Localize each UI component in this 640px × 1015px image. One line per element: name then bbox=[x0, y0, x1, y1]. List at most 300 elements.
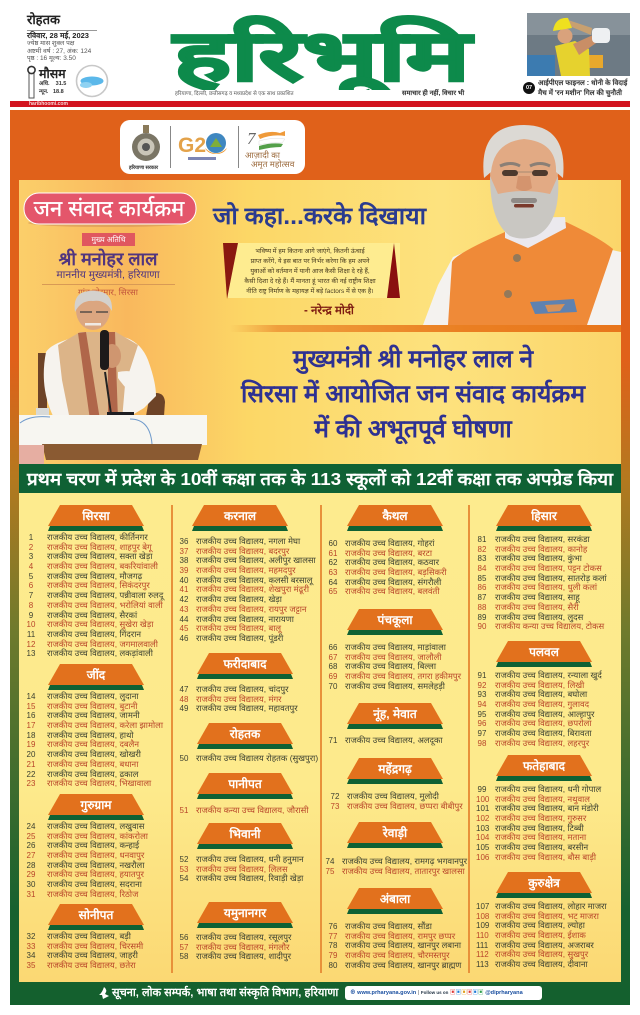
school list: Faridabad: राजकीय उच्च विद्यालय, महावतपुर bbox=[196, 703, 298, 713]
quote right marker bbox=[387, 243, 400, 298]
chief guest name: श्री मनोहर लाल bbox=[59, 249, 157, 269]
school list: Palwal: राजकीय उच्च विद्यालय, गुलावद bbox=[495, 699, 589, 709]
school list: Sirsa: राजकीय उच्च विद्यालय, लकड़ांवाली bbox=[47, 648, 153, 658]
event banner bbox=[24, 192, 196, 227]
text: 34 bbox=[27, 951, 35, 960]
school list: Panchkula: राजकीय उच्च विद्यालय, माड़ांवाला bbox=[345, 642, 446, 652]
footer bbox=[10, 982, 630, 1005]
school list: Kaithal bbox=[345, 539, 447, 597]
district header: Sonipat bbox=[48, 904, 144, 930]
text: 105 bbox=[476, 843, 489, 852]
school list: Jind: राजकीय उच्च विद्यालय, बधाना bbox=[47, 759, 138, 769]
cricket caption bbox=[538, 78, 628, 97]
school list: Kurukshetra: राजकीय उच्च विद्यालय, अजराबर bbox=[495, 940, 594, 950]
school list: Sirsa: राजकीय उच्च विद्यालय, मौजगढ़ bbox=[47, 571, 142, 581]
school list: Kurukshetra: राजकीय उच्च विद्यालय, भट माजरा bbox=[495, 911, 599, 921]
school list: Jind: राजकीय उच्च विद्यालय, करेला झामोला bbox=[47, 720, 163, 730]
text: 80 bbox=[329, 961, 337, 970]
school list: Faridabad: राजकीय उच्च विद्यालय, चांदपुर bbox=[196, 684, 289, 694]
school list: Jind bbox=[26, 691, 164, 788]
text: 44 bbox=[180, 614, 188, 624]
text: 94 bbox=[478, 700, 486, 709]
event banner: जन संवाद कार्यक्रम bbox=[34, 196, 185, 221]
issue details: पृष्ठ : 16 मूल्य: 3.50 bbox=[27, 55, 76, 62]
text: 102 bbox=[476, 814, 489, 823]
school list: Panchkula: राजकीय उच्च विद्यालय, तगरा हकीमपुर bbox=[345, 671, 461, 681]
icon: 75 Azadi logo bbox=[245, 129, 295, 169]
icon: G20 logo: G2 bbox=[178, 134, 206, 157]
text: 109 bbox=[476, 921, 489, 930]
venue: गांव चोरमार, सिरसा bbox=[78, 287, 138, 297]
text: 1 bbox=[29, 533, 33, 542]
district header: Hisar bbox=[496, 505, 592, 531]
school list: Ambala: राजकीय उच्च विद्यालय, खानपुर ब्राह्मण bbox=[345, 960, 461, 970]
text: 21 bbox=[27, 760, 35, 769]
district header: Panchkula: पंचकूला bbox=[377, 613, 413, 628]
school list: Gurugram: राजकीय उच्च विद्यालय, कन्हाई bbox=[47, 840, 139, 850]
school list: Sonipat: राजकीय उच्च विद्यालय, बड़ी bbox=[47, 931, 131, 941]
orange divider band bbox=[230, 325, 621, 332]
text: 99 bbox=[478, 785, 486, 794]
district header: Nuh Mewat: नूंह, मेवात bbox=[372, 707, 418, 722]
school list: Yamunanagar bbox=[196, 933, 291, 962]
text: 75 bbox=[326, 867, 334, 876]
district header: Sirsa bbox=[48, 505, 144, 531]
school list: Kurukshetra: राजकीय उच्च विद्यालय, लोहार माजरा bbox=[495, 901, 607, 911]
emblem label: हरियाणा सरकार bbox=[129, 165, 158, 171]
school list: Mahendragarh: राजकीय उच्च विद्यालय, छप्परा बीबीपुर bbox=[347, 801, 463, 811]
school list: Panchkula bbox=[345, 643, 461, 691]
school list: Kaithal: राजकीय उच्च विद्यालय, गोहरां bbox=[345, 538, 434, 548]
school list: Fatehabad: राजकीय उच्च विद्यालय, बान मंडोरी bbox=[495, 803, 599, 813]
district header: Panchkula bbox=[347, 609, 443, 635]
main announcement heading bbox=[240, 344, 586, 445]
school list: Gurugram: राजकीय उच्च विद्यालय, लखुवास bbox=[47, 821, 144, 831]
quote text: नीति राष्ट्र निर्माण के महायज्ञ में बड़े factors में से एक है। bbox=[246, 288, 374, 295]
school list: Hisar: राजकीय उच्च विद्यालय, कुंभा bbox=[495, 553, 582, 563]
school list: Karnal: राजकीय उच्च विद्यालय, बालू bbox=[196, 623, 281, 633]
text: 88 bbox=[478, 603, 486, 612]
text: 7 bbox=[29, 591, 33, 600]
school list: Hisar: राजकीय उच्च विद्यालय, सैरी bbox=[495, 602, 579, 612]
school list: Fatehabad: राजकीय उच्च विद्यालय, धनी गोपाल bbox=[495, 784, 601, 794]
school list: Panchkula: राजकीय उच्च विद्यालय, समलेहड़ी bbox=[345, 681, 445, 691]
district header: Sonipat: सोनीपत bbox=[78, 908, 114, 922]
text: 73 bbox=[331, 802, 339, 811]
school list: Karnal: राजकीय उच्च विद्यालय, रायपुर जट्टान bbox=[196, 604, 307, 614]
issue details: अष्टमी वर्ष : 27, अंक: 124 bbox=[27, 48, 91, 55]
text: 82 bbox=[478, 545, 486, 554]
district header: Gurugram bbox=[48, 794, 144, 820]
temperatures: अधि. 31.5 bbox=[39, 81, 66, 87]
school list: Karnal: राजकीय उच्च विद्यालय, शेखपुरा मंढूरी bbox=[196, 584, 309, 594]
text: 15 bbox=[27, 702, 35, 711]
cricket caption: मैच में 'रन मशीन' गिल की चुनौती bbox=[538, 89, 622, 97]
social links pill: ⊕ www.prharyana.gov.in | Follow us on ▣▣▣▣▣▣ @diprharyana bbox=[350, 990, 523, 996]
text: 29 bbox=[27, 870, 35, 879]
text: 63 bbox=[329, 568, 337, 577]
school list: Gurugram: राजकीय उच्च विद्यालय, हयातपुर bbox=[47, 869, 144, 879]
text: 12 bbox=[27, 640, 35, 649]
district header: Yamunanagar: यमुनानगर bbox=[223, 906, 267, 921]
cricket caption badge bbox=[523, 82, 535, 94]
text: 108 bbox=[476, 912, 489, 921]
school list: Karnal: राजकीय उच्च विद्यालय, नगला मेघा bbox=[196, 536, 300, 546]
district header: Sirsa: सिरसा bbox=[81, 509, 111, 523]
school list: Nuh Mewat: राजकीय उच्च विद्यालय, अलदूका bbox=[345, 735, 443, 745]
district header: Panipat: पानीपत bbox=[227, 777, 263, 791]
text: 81 bbox=[478, 535, 486, 544]
text: 87 bbox=[478, 593, 486, 602]
school list: Fatehabad: राजकीय उच्च विद्यालय, बरसीन bbox=[495, 842, 588, 852]
school list: Rewari: राजकीय उच्च विद्यालय, रामगढ़ भगवानपुर bbox=[342, 856, 467, 866]
school list: Sirsa: राजकीय उच्च विद्यालय, जगमालवाली bbox=[47, 639, 158, 649]
text: 71 bbox=[329, 736, 337, 745]
school list: Kurukshetra: राजकीय उच्च विद्यालय, दीवाना bbox=[495, 959, 588, 969]
school list: Sonipat: राजकीय उच्च विद्यालय, जाहरी bbox=[47, 950, 138, 960]
icon: 75 Azadi logo: आज़ादी का bbox=[245, 150, 281, 160]
masthead tagline left: हरियाणा, दिल्ली, छत्तीसगढ़ व मध्यप्रदेश से एक साथ प्रकाशित bbox=[175, 91, 294, 97]
district header: Panipat bbox=[197, 773, 293, 799]
school list: Rewari: राजकीय उच्च विद्यालय, तातारपुर खालसा bbox=[342, 866, 465, 876]
district header: Bhiwani: भिवानी bbox=[228, 827, 261, 841]
text: 89 bbox=[478, 612, 486, 622]
school list: Bhiwani bbox=[180, 854, 304, 883]
school list: Jind: राजकीय उच्च विद्यालय, दबलैन bbox=[47, 739, 139, 749]
text: 111 bbox=[476, 941, 488, 950]
text: 11 bbox=[27, 630, 35, 639]
school list: Kurukshetra bbox=[495, 902, 607, 970]
school list: Kaithal: राजकीय उच्च विद्यालय, बड़सिकरी bbox=[345, 567, 447, 577]
school list: Jind: राजकीय उच्च विद्यालय, बुटानी bbox=[47, 701, 137, 711]
text: 100 bbox=[476, 795, 489, 804]
red masthead rule: haribhoomi.com bbox=[29, 101, 68, 107]
weather cloud icon bbox=[76, 64, 108, 98]
text: 54 bbox=[180, 874, 188, 883]
card separators bbox=[170, 126, 239, 168]
school list: Panchkula: राजकीय उच्च विद्यालय, बिल्ला bbox=[345, 661, 436, 671]
main announcement heading: सिरसा में आयोजित जन संवाद कार्यक्रम bbox=[240, 379, 586, 408]
district header: Kaithal bbox=[347, 505, 443, 531]
icon: Haryana emblem bbox=[132, 125, 160, 161]
chief guest ribbon bbox=[82, 233, 135, 246]
text: 74 bbox=[326, 857, 334, 866]
school list: Sonipat: राजकीय उच्च विद्यालय, छतेरा bbox=[47, 960, 136, 970]
district header: Mahendragarh bbox=[347, 758, 443, 784]
district header: Jind: जींद bbox=[86, 667, 106, 682]
quote text: प्राप्त करेंगे, ये इस बात पर निर्भर करेगा कि हम अपने bbox=[251, 258, 369, 265]
main announcement heading: मुख्यमंत्री श्री मनोहर लाल ने bbox=[292, 344, 535, 375]
text: 56 bbox=[180, 933, 188, 942]
text: 77 bbox=[329, 932, 337, 941]
text: 72 bbox=[331, 792, 339, 801]
school list: Sirsa: राजकीय उच्च विद्यालय, भरोलियां वाली bbox=[47, 600, 163, 610]
school list: Fatehabad: राजकीय उच्च विद्यालय, बौस बाड़ी bbox=[495, 852, 596, 862]
school list: Bhiwani: राजकीय उच्च विद्यालय, लिलस bbox=[196, 864, 288, 874]
text: 112 bbox=[476, 950, 489, 959]
text: 86 bbox=[478, 583, 486, 592]
text: 19 bbox=[27, 740, 35, 749]
text: 106 bbox=[476, 853, 489, 862]
quote text bbox=[244, 247, 376, 295]
district header: Karnal bbox=[192, 505, 288, 531]
photo: Manohar Lal bbox=[19, 290, 207, 464]
text: 61 bbox=[329, 549, 337, 558]
quote attribution: - नरेन्द्र मोदी bbox=[304, 305, 354, 317]
text: 53 bbox=[180, 865, 188, 874]
issue details: ज्येष्ठ मास शुक्ल पक्ष bbox=[27, 40, 74, 47]
school list: Karnal: राजकीय उच्च विद्यालय, कलसी बरसालू bbox=[196, 575, 312, 585]
text: 28 bbox=[27, 861, 35, 870]
school list: Sirsa: राजकीय उच्च विद्यालय, सैरकां bbox=[47, 610, 137, 620]
school list: Hisar bbox=[495, 535, 607, 632]
text: 70 bbox=[329, 682, 337, 691]
text: 64 bbox=[329, 578, 337, 587]
masthead: edition block bbox=[26, 12, 108, 98]
text: 79 bbox=[329, 951, 337, 960]
school list: Palwal: राजकीय उच्च विद्यालय, रन्याला खुर्द bbox=[495, 670, 602, 680]
text: 51 bbox=[180, 806, 188, 815]
text: 25 bbox=[27, 832, 35, 841]
school list: Hisar: राजकीय उच्च विद्यालय, सातरोड़ कलां bbox=[495, 573, 607, 583]
red masthead rule bbox=[10, 101, 630, 107]
school list: Kurukshetra: राजकीय उच्च विद्यालय, ल्योहा bbox=[495, 920, 585, 930]
text: 60 bbox=[329, 539, 337, 548]
text: 40 bbox=[180, 576, 188, 585]
icon: department emblem bbox=[98, 986, 111, 1000]
text: 32 bbox=[27, 932, 35, 941]
district header: Kurukshetra: कुरुक्षेत्र bbox=[527, 876, 561, 891]
temperatures: न्यून. 18.8 bbox=[39, 88, 64, 94]
school list: Kaithal: राजकीय उच्च विद्यालय, संगरौली bbox=[345, 577, 441, 587]
text: 3 bbox=[29, 552, 33, 561]
school list: Karnal: राजकीय उच्च विद्यालय, अलीपुर खालसा bbox=[196, 555, 316, 565]
text: 50 bbox=[180, 754, 188, 763]
text: 13 bbox=[27, 649, 35, 658]
school list: Yamunanagar: राजकीय उच्च विद्यालय, मंगलौर bbox=[196, 942, 289, 952]
text: 31 bbox=[27, 890, 35, 899]
main announcement heading: में की अभूतपूर्व घोषणा bbox=[313, 414, 513, 445]
school list: Sirsa: राजकीय उच्च विद्यालय, बकरियांवाली bbox=[47, 561, 158, 571]
icon: 75 Azadi logo: 7 bbox=[247, 129, 257, 148]
social links pill bbox=[345, 986, 542, 1000]
district header: Rohtak: रोहतक bbox=[229, 727, 261, 741]
text: 83 bbox=[478, 554, 486, 563]
weather thermometer icon bbox=[27, 66, 36, 98]
school list: Palwal: राजकीय उच्च विद्यालय, लिखी bbox=[495, 680, 584, 690]
temperatures bbox=[38, 80, 66, 95]
school list: Jind: राजकीय उच्च विद्यालय, भिखावाला bbox=[47, 778, 151, 788]
text: 107 bbox=[476, 902, 489, 911]
school list: Kurukshetra: राजकीय उच्च विद्यालय, ईशाक bbox=[495, 930, 586, 940]
quote left marker bbox=[223, 243, 238, 299]
district header: Rewari bbox=[347, 822, 443, 848]
school list: Palwal: राजकीय उच्च विद्यालय, लहरपुर bbox=[495, 738, 589, 748]
school list: Rewari bbox=[342, 857, 467, 876]
text: 41 bbox=[180, 585, 188, 594]
text: 45 bbox=[180, 624, 188, 633]
text: 35 bbox=[27, 961, 35, 970]
text: 92 bbox=[478, 681, 486, 690]
district header: Ambala: अंबाला bbox=[380, 892, 411, 906]
text: 62 bbox=[329, 558, 337, 567]
text: 18 bbox=[27, 731, 35, 740]
school list: Sirsa bbox=[27, 532, 165, 658]
upper yellow panel bbox=[19, 180, 621, 464]
school list: Sirsa: राजकीय उच्च विद्यालय, सुखेरा खेड़ा bbox=[47, 619, 153, 629]
text: 52 bbox=[180, 855, 188, 864]
school list: Karnal: राजकीय उच्च विद्यालय, बदरपुर bbox=[196, 546, 289, 556]
edition city: रोहतक bbox=[27, 12, 60, 27]
cricket caption: आईपीएल फाइनल : धोनी के विदाई bbox=[538, 79, 627, 87]
district header: Palwal: पलवल bbox=[528, 645, 560, 659]
frame top orange band bbox=[10, 110, 630, 180]
school list: Sonipat bbox=[26, 931, 144, 970]
district header: Bhiwani bbox=[197, 823, 293, 849]
photo: Narendra Modi bbox=[423, 125, 621, 325]
school list: Gurugram: राजकीय उच्च विद्यालय, रिठोज bbox=[47, 889, 138, 899]
district header: Faridabad bbox=[197, 653, 293, 679]
text: 58 bbox=[180, 952, 188, 961]
text: 33 bbox=[27, 942, 35, 951]
text: 47 bbox=[180, 685, 188, 694]
district header: Fatehabad bbox=[496, 755, 592, 781]
district header: Palwal bbox=[496, 641, 592, 667]
school list: Faridabad: राजकीय उच्च विद्यालय, मंगर bbox=[196, 694, 282, 704]
district header: Rewari: रेवाड़ी bbox=[382, 826, 408, 840]
masthead tagline right: समाचार ही नहीं, विचार भी bbox=[402, 90, 464, 97]
district header: Yamunanagar bbox=[197, 902, 293, 928]
quote box bbox=[228, 243, 400, 298]
school list: Bhiwani: राजकीय उच्च विद्यालय, रिवाड़ी खेड़ा bbox=[196, 873, 303, 883]
text: 57 bbox=[180, 943, 188, 952]
school list: Jind: राजकीय उच्च विद्यालय, खोखरी bbox=[47, 749, 141, 759]
text: 2 bbox=[29, 543, 33, 552]
school list: Sirsa: राजकीय उच्च विद्यालय, सक्ता खेड़ा bbox=[47, 551, 152, 561]
text: 22 bbox=[27, 770, 35, 778]
green announcement band bbox=[19, 464, 621, 493]
text: 17 bbox=[27, 721, 35, 730]
text: 76 bbox=[329, 922, 337, 931]
district header: Hisar: हिसार bbox=[530, 509, 558, 523]
text: 96 bbox=[478, 719, 486, 728]
school list: Ambala: राजकीय उच्च विद्यालय, खानपुर लबाना bbox=[345, 940, 461, 950]
school list: Panchkula: राजकीय उच्च विद्यालय, जालौली bbox=[345, 652, 442, 662]
school list: Rohtak: राजकीय उच्च विद्यालय रोहतक (सुखपुरा) bbox=[196, 753, 318, 763]
school list: Hisar: राजकीय कन्या उच्च विद्यालय, टोकस bbox=[495, 621, 604, 631]
text: 46 bbox=[180, 634, 188, 643]
district header: Karnal: करनाल bbox=[223, 509, 257, 523]
text: 26 bbox=[27, 841, 35, 850]
quote text: कैसी दिशा दे रहे हैं। मैं मानता हूं भारत की नई राष्ट्रीय शिक्षा bbox=[244, 278, 376, 285]
text: 90 bbox=[478, 622, 486, 631]
school list: Gurugram: राजकीय उच्च विद्यालय, नखरौला bbox=[47, 860, 144, 870]
text: 20 bbox=[27, 750, 35, 759]
text: 27 bbox=[27, 851, 35, 860]
text: 93 bbox=[478, 690, 486, 699]
school list: Karnal bbox=[180, 536, 316, 644]
school list: Gurugram: राजकीय उच्च विद्यालय, धनवापुर bbox=[47, 850, 144, 860]
weather heading: मौसम bbox=[39, 67, 66, 81]
text: 85 bbox=[478, 574, 486, 583]
text: 91 bbox=[478, 671, 486, 680]
school list: Bhiwani: राजकीय उच्च विद्यालय, धनी हनुमान bbox=[196, 854, 304, 864]
text: 65 bbox=[329, 587, 337, 596]
school list: Fatehabad: राजकीय उच्च विद्यालय, मताना bbox=[495, 832, 586, 842]
school list: Sirsa: राजकीय उच्च विद्यालय, पन्नीवाला रुलदू bbox=[47, 590, 163, 600]
text: 5 bbox=[29, 572, 33, 581]
text: 49 bbox=[180, 704, 188, 713]
school list: Sirsa: राजकीय उच्च विद्यालय, शाहपुर बेगू bbox=[47, 542, 152, 552]
school list panel bbox=[19, 493, 621, 982]
school list: Palwal: राजकीय उच्च विद्यालय, बिरावता bbox=[495, 728, 592, 738]
text: 16 bbox=[27, 711, 35, 720]
school list: Jind: राजकीय उच्च विद्यालय, जामनी bbox=[47, 710, 140, 720]
school list: Sirsa: राजकीय उच्च विद्यालय, सिकंदरपुर bbox=[47, 580, 150, 590]
school list: Fatehabad: राजकीय उच्च विद्यालय, टिब्बी bbox=[495, 823, 584, 833]
school list: Kurukshetra: राजकीय उच्च विद्यालय, सुखपुर bbox=[495, 949, 588, 959]
text: 103 bbox=[476, 824, 489, 833]
school list: Karnal: राजकीय उच्च विद्यालय, महमदपुर bbox=[196, 565, 296, 575]
school list: Yamunanagar: राजकीय उच्च विद्यालय, शादीपुर bbox=[196, 951, 291, 961]
text: 110 bbox=[476, 931, 489, 940]
school list: Panipat: राजकीय कन्या उच्च विद्यालय, जौरासी bbox=[196, 805, 309, 815]
logo card bbox=[120, 120, 305, 174]
text: 9 bbox=[29, 610, 33, 620]
district header: Fatehabad: फतेहाबाद bbox=[522, 759, 566, 773]
text: 84 bbox=[478, 564, 486, 573]
school list: Palwal: राजकीय उच्च विद्यालय, बघोला bbox=[495, 689, 587, 699]
issue details bbox=[27, 39, 92, 62]
school list: Hisar: राजकीय उच्च विद्यालय, साहू bbox=[495, 592, 580, 602]
school list: Sirsa: राजकीय उच्च विद्यालय, गिंदरान bbox=[47, 629, 141, 639]
text: 39 bbox=[180, 566, 188, 575]
date line: रविवार, 28 मई, 2023 bbox=[27, 31, 89, 40]
text: 14 bbox=[27, 692, 35, 701]
school list: Hisar: राजकीय उच्च विद्यालय, लुदस bbox=[495, 612, 583, 622]
text: 30 bbox=[27, 880, 35, 889]
district header: Nuh Mewat bbox=[347, 703, 443, 729]
band text: प्रथम चरण में प्रदेश के 10वीं कक्षा तक के 113 स्कूलों को 12वीं कक्षा तक अपग्रेड किया bbox=[26, 468, 615, 491]
school list: Gurugram: राजकीय उच्च विद्यालय, सदराना bbox=[47, 879, 142, 889]
school list: Fatehabad bbox=[495, 785, 601, 862]
text: 43 bbox=[180, 605, 188, 614]
school list: Palwal: राजकीय उच्च विद्यालय, आल्हापुर bbox=[495, 709, 594, 719]
school list: Karnal: राजकीय उच्च विद्यालय, खेड़ा bbox=[196, 594, 282, 604]
footer department text: सूचना, लोक सम्पर्क, भाषा तथा संस्कृति विभाग, हरियाणा bbox=[112, 987, 338, 999]
cricket caption badge: 07 bbox=[526, 85, 532, 91]
guest divider bbox=[42, 284, 175, 285]
school list: Faridabad bbox=[180, 684, 298, 714]
district header: Rohtak bbox=[197, 723, 293, 749]
text: 38 bbox=[180, 556, 188, 565]
school list: Fatehabad: राजकीय उच्च विद्यालय, गुरुसर bbox=[495, 813, 586, 823]
district header: Mahendragarh: महेंद्रगढ़ bbox=[377, 762, 413, 776]
school list: Jind: राजकीय उच्च विद्यालय, ढकाल bbox=[47, 768, 138, 778]
school list: Jind: राजकीय उच्च विद्यालय, लुदाना bbox=[47, 691, 139, 701]
text: 98 bbox=[478, 739, 486, 748]
text: 78 bbox=[329, 941, 337, 950]
text: 36 bbox=[180, 537, 188, 546]
text: 23 bbox=[27, 779, 35, 788]
chief guest ribbon: मुख्य अतिथि bbox=[92, 235, 126, 244]
text: 104 bbox=[476, 833, 489, 842]
text: 66 bbox=[329, 643, 337, 652]
text: 69 bbox=[329, 672, 337, 681]
school list: Palwal: राजकीय उच्च विद्यालय, छपरोला bbox=[495, 718, 592, 728]
text: 37 bbox=[180, 547, 188, 556]
district header: Ambala bbox=[347, 888, 443, 914]
